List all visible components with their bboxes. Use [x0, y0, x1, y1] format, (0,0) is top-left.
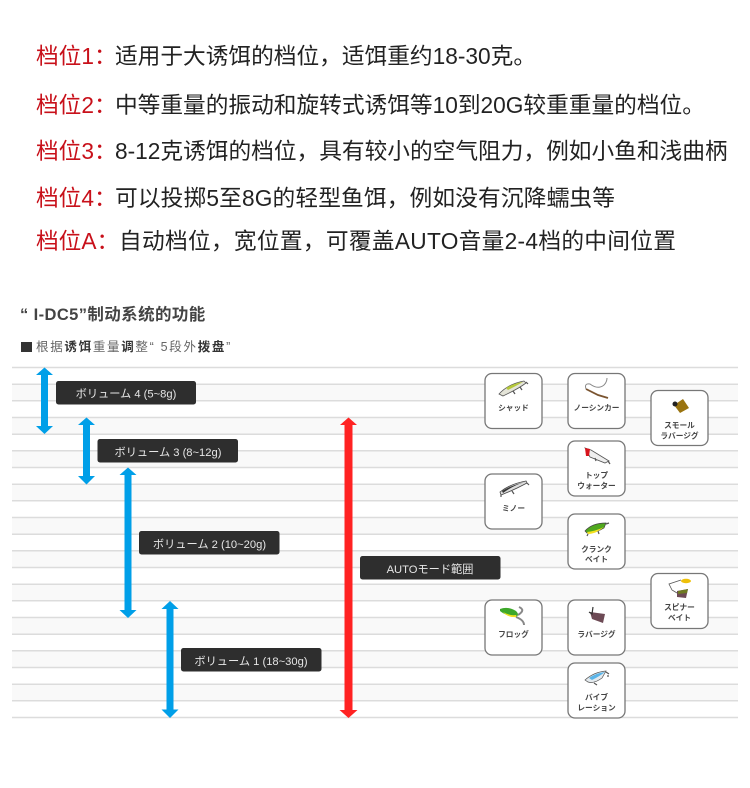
- card: no sinker: [568, 374, 625, 428]
- arrow: volume 3 range: [78, 418, 95, 484]
- label: volume 1: [181, 648, 322, 672]
- card: crank bait: クランク: [581, 544, 612, 554]
- label: volume 4: ボリューム 4 (5~8g): [76, 388, 177, 400]
- card: vibration: バイブ: [585, 692, 608, 702]
- subheading: 根据诱饵重量调整“ 5段外拨盘”: [36, 339, 232, 354]
- arrow: auto range: [340, 418, 358, 718]
- card: top water: [568, 441, 625, 496]
- card: no sinker: ノーシンカー: [574, 404, 619, 412]
- gear 4 line: 可以投掷5至8G的轻型鱼饵，例如没有沉降蠕虫等: [115, 185, 615, 211]
- gear 4 line: 档位4：: [36, 185, 117, 211]
- arrow: volume 1 range: [162, 601, 178, 718]
- label: volume 3: ボリューム 3 (8~12g): [115, 446, 222, 459]
- heading: “ I-DC5”制动系统的功能: [20, 304, 206, 324]
- card: rubber jig: ラバージグ: [577, 629, 616, 639]
- card: top water: トップ: [585, 471, 608, 480]
- card: frog: [485, 600, 542, 655]
- gear 3 line: 档位3：: [36, 138, 117, 164]
- gear 1 line: 适用于大诱饵的档位，适饵重约18-30克。: [115, 43, 536, 69]
- card: small rubber jig: ラバージグ: [660, 430, 699, 440]
- card: shad: [485, 374, 542, 428]
- gear 1 line: 档位1：: [36, 43, 117, 69]
- card: crank bait: [568, 514, 625, 569]
- gear 2 line: 档位2：: [36, 92, 117, 118]
- text block: gear descriptions: [36, 43, 728, 254]
- card: crank bait: ベイト: [585, 555, 608, 564]
- label: auto mode: [360, 556, 500, 580]
- gear A line: 自动档位，宽位置，可覆盖AUTO音量2-4档的中间位置: [119, 228, 676, 254]
- card: shad: シャッド: [498, 404, 529, 412]
- gear 2 line: 中等重量的振动和旋转式诱饵等10到20G较重重量的档位。: [115, 92, 705, 118]
- card: small rubber jig: スモール: [664, 421, 695, 430]
- label: volume 4: [56, 381, 196, 404]
- card: vibration: レーション: [577, 704, 616, 712]
- card: spinner bait: スピナー: [664, 603, 695, 612]
- label: volume 2: ボリューム 2 (10~20g): [153, 538, 266, 551]
- card: minnow: ミノー: [502, 504, 525, 513]
- card: spinner bait: [651, 574, 708, 628]
- card: vibration: [568, 663, 625, 718]
- label: volume 3: [98, 439, 238, 462]
- gear A line: 档位A：: [36, 228, 119, 254]
- card: spinner bait: ベイト: [668, 614, 691, 622]
- card: frog: フロッグ: [498, 629, 529, 639]
- arrow: volume 2 range: [120, 468, 136, 618]
- gear 3 line: 8-12克诱饵的档位，具有较小的空气阻力，例如小鱼和浅曲柄: [115, 138, 728, 164]
- card: rubber jig: [568, 600, 625, 655]
- label: volume 2: [139, 531, 280, 554]
- card: top water: ウォーター: [577, 480, 616, 490]
- card: minnow: [485, 474, 542, 529]
- label: auto mode: AUTOモード範囲: [387, 562, 473, 576]
- label: volume 1: ボリューム 1 (18~30g): [194, 655, 308, 668]
- card: small rubber jig: [651, 390, 708, 446]
- arrow: volume 4 range: [36, 368, 53, 434]
